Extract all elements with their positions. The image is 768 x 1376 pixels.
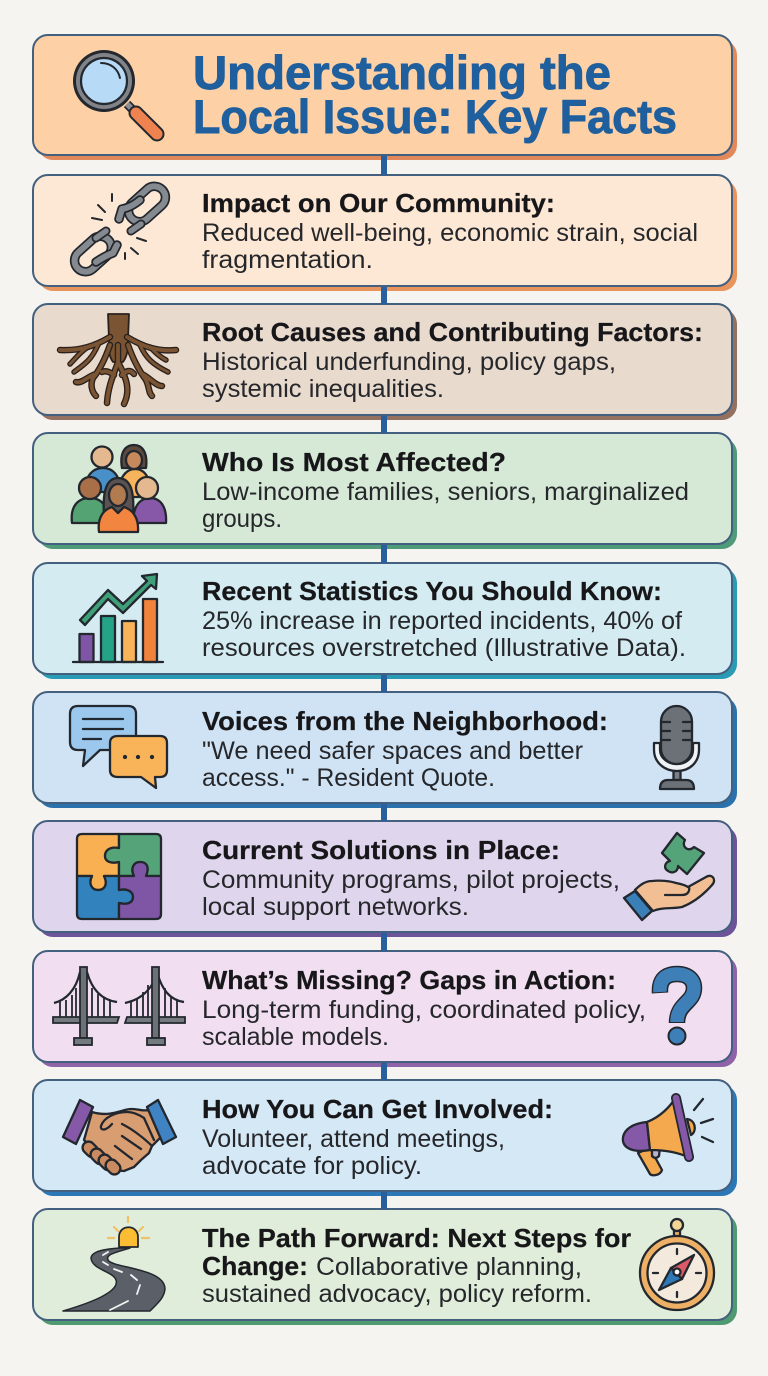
text: get involved: Volunteer, attend meetings,	[202, 1125, 505, 1153]
connector spine	[381, 156, 387, 1209]
text: what's missing: Long-term funding, coordinated policy,	[202, 996, 646, 1024]
panel: recent statistics	[33, 563, 737, 679]
text: what's missing	[202, 965, 646, 1051]
text: get involved: advocate for policy.	[202, 1152, 422, 1180]
text: solutions: Current Solutions in Place:	[202, 835, 560, 865]
text: what's missing: scalable models.	[202, 1023, 389, 1051]
panel: current solutions	[33, 821, 737, 937]
text: statistics	[202, 576, 686, 662]
text: get involved	[202, 1094, 553, 1180]
text: who is affected: groups.	[202, 505, 282, 533]
icon: handshake	[63, 1100, 176, 1177]
text: voices: "We need safer spaces and better	[202, 737, 583, 765]
heading: title: Local Issue: Key Facts	[193, 90, 677, 143]
text: path forward: Collaborative planning,	[316, 1253, 582, 1281]
text: root causes: Historical underfunding, policy gaps,	[202, 348, 616, 376]
text: impact: Impact on Our Community:	[202, 188, 555, 218]
icon: broken bridges	[53, 967, 185, 1045]
text: get involved: How You Can Get Involved:	[202, 1094, 553, 1124]
icon: puzzle square	[77, 834, 161, 919]
text: who is affected: Who Is Most Affected?	[202, 447, 506, 477]
text: voices: Voices from the Neighborhood:	[202, 706, 608, 736]
panel: title header	[33, 35, 737, 160]
icon: hand holding puzzle piece	[624, 833, 714, 920]
icon: magnifying glass	[73, 50, 157, 134]
text: impact: Reduced well-being, economic strain, social	[202, 219, 698, 247]
text: path forward	[202, 1223, 631, 1308]
icon: question mark	[660, 974, 694, 1044]
icon: speech bubbles	[70, 706, 167, 788]
text: path forward: Change:	[202, 1251, 308, 1281]
text: statistics: Recent Statistics You Should Know:	[202, 576, 662, 606]
text: solutions: local support networks.	[202, 893, 469, 921]
icon: compass	[640, 1219, 714, 1310]
text: statistics: 25% increase in reported incidents, 40% of	[202, 607, 682, 635]
text: impact: fragmentation.	[202, 246, 373, 274]
panel: who is most affected	[33, 433, 737, 549]
text: solutions	[202, 835, 620, 921]
text: solutions: Community programs, pilot projects,	[202, 866, 620, 894]
panel: root causes	[33, 304, 737, 420]
text: what's missing: What’s Missing? Gaps in Action:	[202, 965, 616, 995]
panel: the path forward	[33, 1209, 737, 1325]
panel: impact on our community	[33, 175, 737, 291]
icon: megaphone	[623, 1097, 713, 1175]
text: root causes: systemic inequalities.	[202, 375, 444, 403]
text: voices	[202, 706, 608, 792]
text: root causes	[202, 317, 703, 403]
icon: winding road with light	[63, 1217, 165, 1311]
text: voices: access." - Resident Quote.	[202, 764, 495, 792]
text: root causes: Root Causes and Contributing Factors:	[202, 317, 703, 347]
icon: tree roots	[60, 314, 176, 404]
text: who is affected: Low-income families, seniors, marginalized	[202, 478, 689, 506]
text: path forward: sustained advocacy, policy reform.	[202, 1280, 592, 1308]
icon: bar chart with arrow	[73, 574, 163, 662]
icon: microphone	[654, 706, 699, 789]
text: impact	[202, 188, 698, 274]
icon: broken chain	[70, 182, 170, 276]
text: path forward: The Path Forward: Next Steps for	[202, 1223, 631, 1253]
text: statistics: resources overstretched (Illustrative Data).	[202, 634, 686, 662]
heading: title	[193, 46, 677, 143]
icon: group of people	[72, 445, 166, 532]
panel: how you can get involved	[33, 1080, 737, 1196]
heading: title: Understanding the	[193, 46, 611, 99]
text: who is affected	[202, 447, 689, 533]
panel: voices from the neighborhood	[33, 692, 737, 808]
panel: what's missing	[33, 951, 737, 1067]
